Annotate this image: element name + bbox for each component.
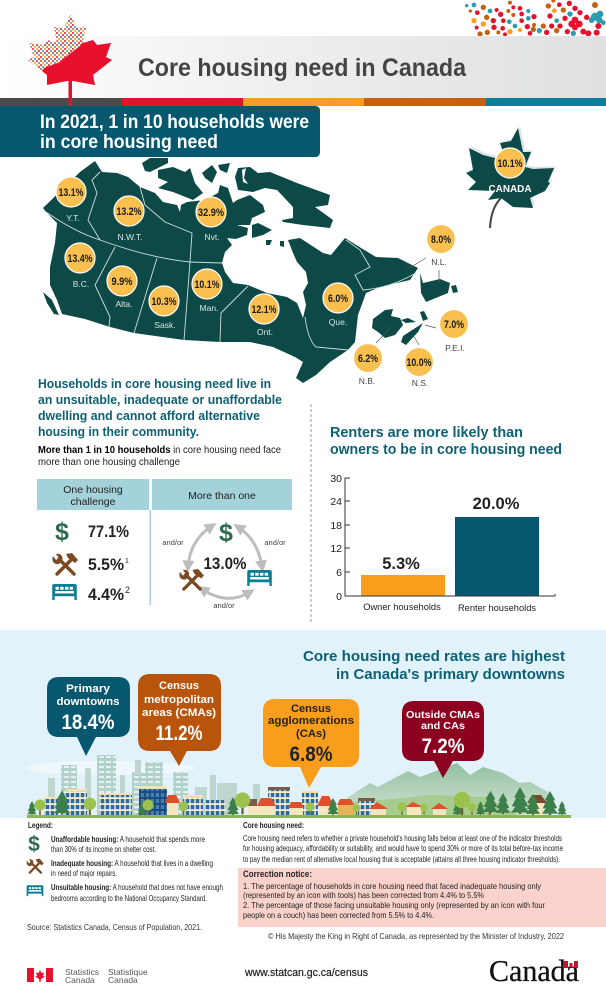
correction notice: 1. The percentage of households in core housing need that faced inadequate housing only <box>243 881 542 891</box>
map value bubbles: 10.0% <box>406 357 432 369</box>
header band <box>0 36 606 106</box>
heading: primary downtowns: in Canada's primary downtowns <box>336 666 565 683</box>
province labels: P.E.I. <box>445 343 465 353</box>
Victoria Island <box>158 167 203 200</box>
correction notice: Correction notice: <box>243 869 312 879</box>
column: one housing challenge: 5.5% <box>88 555 124 574</box>
correction notice: (represented by an icon with tools) has been corrected from 4.4% to 5.5% <box>243 890 485 900</box>
bar chart: owners vs renters: Renter households <box>458 603 536 613</box>
table: housing challenges: One housing <box>63 484 123 496</box>
heading box: 1 in 10 households <box>0 106 320 157</box>
Statistics Canada signature: Statistique <box>108 967 148 977</box>
bar chart: owners vs renters <box>330 473 555 613</box>
heading: primary downtowns <box>303 648 565 683</box>
diagram: more than one challenge <box>162 519 286 610</box>
callout: census metropolitan areas: metropolitan <box>144 694 214 706</box>
bar chart: owners vs renters: 0 <box>336 591 342 603</box>
correction notice <box>238 868 606 927</box>
diagram: more than one challenge: and/or <box>162 538 184 547</box>
callout: outside CMAs and CAs: and CAs <box>421 720 465 732</box>
heading box: 1 in 10 households: In 2021, 1 in 10 households were <box>40 112 309 133</box>
heading: primary downtowns: Core housing need rates are highest <box>303 648 565 665</box>
Statistics Canada signature: Statistics <box>65 967 99 977</box>
source: Source: Statistics Canada, Census of Population, 2021. <box>27 922 202 932</box>
Southampton Island <box>252 223 272 238</box>
callout: census agglomerations: Census <box>291 703 331 715</box>
bar chart: owners vs renters: 6 <box>336 567 342 579</box>
column: one housing challenge: 77.1% <box>88 522 129 541</box>
legend: Inadequate housing: A household that lives in a dwelling <box>51 859 213 868</box>
leader lines for eastern provinces <box>376 258 439 345</box>
province labels: N.W.T. <box>117 232 143 242</box>
table: housing challenges: challenge <box>71 496 116 508</box>
icon: maple leaf logo <box>28 14 112 106</box>
legend icon: couch <box>27 885 43 896</box>
callout: primary downtowns: 18.4% <box>62 711 115 734</box>
callout: primary downtowns: Primary <box>66 683 111 695</box>
Statistics Canada signature <box>27 967 148 985</box>
title: Core housing need in Canada <box>138 54 467 82</box>
heading: households in core housing need <box>38 376 282 439</box>
table: housing challenges: More than one <box>188 490 256 502</box>
province labels: N.S. <box>412 378 428 388</box>
callout: outside CMAs and CAs: 7.2% <box>422 735 465 758</box>
heading box: 1 in 10 households: in core housing need <box>40 132 218 153</box>
decorative dot pattern top right <box>465 0 606 37</box>
Vancouver Island <box>43 292 59 315</box>
diagram: more than one challenge: and/or <box>264 538 286 547</box>
heading: households in core housing need: an unsuitable, inadequate or unaffordable <box>38 392 282 407</box>
Canada leaf callout: CANADA <box>488 184 532 195</box>
legend: bedrooms according to the National Occupancy Standard. <box>51 894 207 903</box>
bar chart: owners vs renters: 5.3% <box>382 555 420 573</box>
callout: outside CMAs and CAs: Outside CMAs <box>406 709 480 721</box>
legend: Unsuitable housing: A household that does not have enough <box>51 883 223 892</box>
subheading text: more than one housing challenge <box>38 457 181 468</box>
map value bubbles: 13.2% <box>116 206 142 218</box>
callout: census metropolitan areas: areas (CMAs) <box>142 707 216 719</box>
callout: outside CMAs and CAs <box>402 701 484 778</box>
bar chart: owners vs renters: 18 <box>330 520 342 532</box>
map value bubbles: 9.9% <box>112 276 133 288</box>
column: one housing challenge: 4.4% <box>88 585 124 604</box>
province labels: N.B. <box>359 376 375 386</box>
legend: Unaffordable housing: A household that spends more <box>51 835 205 844</box>
callout: census agglomerations: (CAs) <box>296 728 326 740</box>
Statistics Canada signature: Canada <box>65 975 95 985</box>
Canada leaf callout: 10.1% <box>498 158 523 170</box>
province labels: Y.T. <box>66 213 80 223</box>
province labels: Man. <box>200 303 218 313</box>
map value bubbles: 6.0% <box>328 293 348 305</box>
heading: renters <box>330 425 562 458</box>
heading: renters: Renters are more likely than <box>330 425 523 441</box>
Statistics Canada signature: Canada <box>108 975 138 985</box>
map of Canada <box>43 158 458 383</box>
website: www.statcan.gc.ca/census <box>244 967 368 979</box>
bar chart: owners vs renters: Owner households <box>363 602 441 612</box>
callout: primary downtowns: downtowns <box>56 696 120 708</box>
Canada leaf callout <box>466 126 556 228</box>
callout: census metropolitan areas: Census <box>159 680 199 692</box>
bar chart: owners vs renters: 30 <box>330 473 342 485</box>
dashed divider <box>310 404 312 624</box>
definition: core housing need <box>243 821 563 864</box>
callout: census agglomerations: agglomerations <box>268 715 354 727</box>
Banks Island <box>142 158 168 172</box>
Baffin Island <box>235 167 333 228</box>
correction notice: 2. The percentage of those facing unsuitable housing only (represented by an icon with four <box>243 900 545 910</box>
map value bubbles: 8.0% <box>431 234 451 246</box>
legend: than 30% of its income on shelter cost. <box>51 845 156 854</box>
legend: in need of major repairs. <box>51 869 117 878</box>
definition: core housing need: Core housing need: <box>243 821 304 830</box>
legend icon: dollar: $ <box>28 833 40 856</box>
province labels <box>66 213 465 388</box>
column: one housing challenge: 2 <box>125 585 130 595</box>
subheading text: More than 1 in 10 households in core housing need face <box>38 445 282 456</box>
legend <box>27 821 223 903</box>
heading: households in core housing need: housing in their community. <box>38 424 199 439</box>
province labels: Ont. <box>257 327 273 337</box>
diagram: more than one challenge: 13.0% <box>204 554 246 573</box>
bar chart: owners vs renters: 20.0% <box>473 495 520 513</box>
callout: census metropolitan areas <box>138 674 221 766</box>
bar chart: owners vs renters: 12 <box>330 543 342 555</box>
panel: downtown section background <box>0 630 606 818</box>
heading: renters: owners to be in core housing need <box>330 442 562 458</box>
column: one housing challenge: 1 <box>125 558 129 565</box>
illustration: skyline and landscape <box>25 755 571 818</box>
map value bubbles: 12.1% <box>252 304 277 316</box>
bar chart: owners vs renters: 24 <box>330 496 342 508</box>
map value bubbles: 13.4% <box>68 253 93 265</box>
map value bubbles: 6.2% <box>358 353 378 365</box>
diagram: more than one challenge: and/or <box>213 601 235 610</box>
Canada wordmark: Canada <box>489 953 579 988</box>
province labels: B.C. <box>73 279 89 289</box>
province labels: Alta. <box>115 299 133 309</box>
copyright: © His Majesty the King in Right of Canada, as represented by the Minister of Industry, 2022 <box>268 931 564 941</box>
legend icon: tools <box>27 859 44 873</box>
map value bubbles <box>56 177 468 376</box>
map value bubbles: 7.0% <box>444 319 464 331</box>
province labels: N.L. <box>431 257 447 267</box>
province labels: Nvt. <box>204 232 220 242</box>
map value bubbles: 32.9% <box>198 207 224 219</box>
province labels: Sask. <box>154 320 176 330</box>
legend: Legend: <box>28 821 53 830</box>
callout: census agglomerations <box>263 699 359 788</box>
heading: households in core housing need: Households in core housing need live in <box>38 376 271 391</box>
callout: census metropolitan areas: 11.2% <box>156 722 203 745</box>
heading: households in core housing need: dwelling and cannot afford alternative <box>38 408 260 423</box>
map value bubbles: 10.1% <box>194 279 220 291</box>
table: housing challenges <box>37 479 292 610</box>
callout: primary downtowns <box>47 677 130 756</box>
map value bubbles: 10.3% <box>152 296 177 308</box>
map value bubbles: 13.1% <box>58 187 84 199</box>
column: one housing challenge <box>52 518 130 604</box>
province labels: Que. <box>329 317 347 327</box>
callout: census agglomerations: 6.8% <box>290 743 333 766</box>
correction notice: people on a couch) has been corrected from 5.5% to 4.4%. <box>243 910 434 920</box>
diagram: more than one challenge: $ <box>219 519 233 547</box>
column: one housing challenge: $ <box>55 518 69 546</box>
subheading text <box>38 445 282 468</box>
